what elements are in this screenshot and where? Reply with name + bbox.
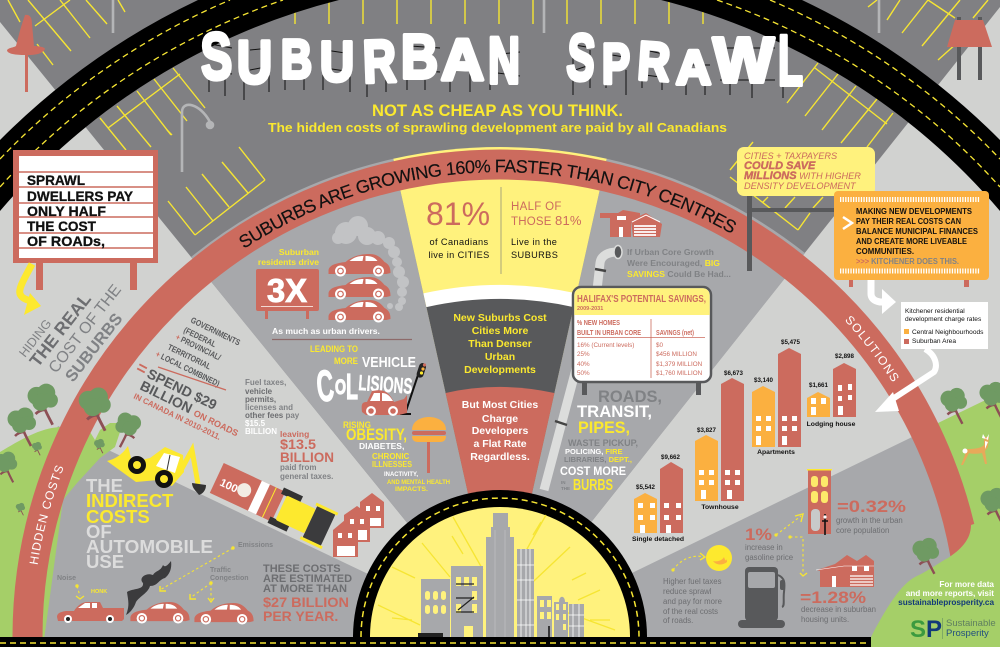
- arc heading: SUBURBS ARE GROWING 160% FASTER THAN CITY CENTRES: [240, 160, 736, 248]
- stat: half of those: THOSE 81%: [511, 213, 582, 228]
- indirect costs heading: OF: [86, 521, 112, 542]
- stat: 1.28 percent: [800, 588, 876, 624]
- stat: 81 percent: [426, 196, 490, 260]
- chart: development charges, townhouse: $6,673: [724, 370, 743, 377]
- leaving 13.5 billion: [280, 429, 334, 481]
- callout: making new developments: AND CREATE MORE LIVEABLE: [856, 237, 968, 246]
- leading to more vehicle collisions: MORE: [334, 356, 358, 367]
- obesity text: AND MENTAL HEALTH: [387, 479, 450, 486]
- leaving 13.5 billion: general taxes.: [280, 472, 333, 481]
- text: if urban core growth: SAVINGS Could Be Had...: [627, 269, 731, 279]
- indirect costs heading: THE: [86, 475, 123, 496]
- obesity text: OBESITY,: [346, 426, 407, 444]
- title: P: [602, 32, 630, 96]
- chart: development charges, apartments: $5,475: [781, 339, 800, 346]
- dotted arrows: automobile costs: [75, 546, 235, 602]
- text: higher fuel taxes: of roads.: [663, 616, 693, 625]
- callout: cities and taxpayers: MILLIONS WITH HIGHER: [744, 170, 861, 182]
- text: higher fuel taxes: of the real costs: [663, 607, 718, 616]
- divider: [500, 187, 502, 274]
- leading to more vehicle collisions: O: [335, 376, 346, 399]
- text: flat rate: Charge: [482, 413, 518, 425]
- indirect costs heading: USE: [86, 551, 124, 572]
- icon: coin: [671, 545, 732, 572]
- roads transit pipes text: [560, 388, 662, 494]
- stat: 0.32 percent: =0.32%: [837, 497, 906, 516]
- sign: halifax potential savings: BUILT IN URBAN CORE: [577, 330, 641, 337]
- sun dome: [370, 507, 630, 637]
- fuel taxes text: permits,: [245, 395, 276, 404]
- callout: making new developments: BALANCE MUNICIPAL FINANCES: [856, 227, 979, 236]
- sign: halifax potential savings: 40%: [577, 361, 590, 368]
- text: new suburbs cost: Cities More: [472, 325, 528, 337]
- callout: cities and taxpayers: COULD SAVE: [744, 160, 816, 172]
- fuel taxes text: Fuel taxes,: [245, 378, 286, 387]
- chart: development charges, apartments: [752, 339, 801, 456]
- callout: making new developments: [834, 191, 989, 287]
- chart: development charges, townhouse: [695, 370, 744, 511]
- green footer text: For more data: [939, 580, 994, 589]
- sector: roads and pipes: [500, 159, 805, 637]
- text: flat rate: Developers: [472, 425, 528, 437]
- callout: cities and taxpayers: DENSITY DEVELOPMENT: [744, 181, 857, 191]
- obesity text: RISING: [343, 420, 371, 430]
- icon: suburban house: [816, 555, 874, 587]
- sun rays: [378, 515, 615, 630]
- stat: 81 percent: 81%: [426, 196, 490, 232]
- logo: sustainable prosperity: Sustainable: [946, 618, 996, 629]
- chart: development charges, lodging house: $1,661: [809, 382, 828, 389]
- text: higher fuel taxes: and pay for more: [663, 597, 722, 606]
- leaving 13.5 billion: BILLION: [280, 449, 334, 465]
- chart: development charges, single detached: $5,542: [636, 484, 655, 491]
- title: U: [320, 30, 354, 94]
- these costs text: AT MORE THAN: [263, 583, 347, 595]
- subtitle: The hidden costs of sprawling development are paid by all Canadians: [268, 121, 727, 135]
- fuel taxes text: [245, 378, 300, 436]
- indirect costs heading: [86, 475, 213, 572]
- title: S: [565, 19, 598, 95]
- chart: development charges, single detached: Single detached: [632, 536, 684, 543]
- subtitle: NOT AS CHEAP AS YOU THINK.: [372, 102, 623, 120]
- right light ground wedge: [500, 7, 1000, 647]
- icon: burger: [412, 417, 446, 473]
- parking lines: [8, 0, 988, 235]
- three cars: [328, 254, 390, 322]
- outer road: [0, 0, 1000, 211]
- icon: house: [600, 210, 662, 237]
- icon: red road sign right: [947, 17, 992, 80]
- sign: halifax potential savings: % NEW HOMES: [577, 320, 620, 327]
- text: higher fuel taxes: [663, 577, 722, 625]
- dotted arrows: gasoline effects: [774, 514, 807, 576]
- green hill left: [0, 423, 123, 640]
- 3x sign: [256, 269, 319, 319]
- text: higher fuel taxes: reduce sprawl: [663, 587, 712, 596]
- these costs text: ARE ESTIMATED: [263, 573, 352, 585]
- roads transit pipes text: ROADS,: [598, 388, 662, 406]
- sign: halifax potential savings: $456 MILLION: [656, 351, 697, 358]
- chart: development charges, single detached: [632, 454, 684, 543]
- callout: making new developments: COMMUNITIES.: [856, 247, 914, 256]
- sign: halifax potential savings: SAVINGS (net): [656, 330, 694, 337]
- cars in traffic: [57, 602, 254, 624]
- fuel taxes text: $15.5: [245, 419, 266, 428]
- title: N: [488, 23, 520, 97]
- 3x sign: 3X: [267, 272, 307, 309]
- stat: 1.28 percent: housing units.: [801, 615, 849, 624]
- roads transit pipes text: PIPES,: [578, 419, 630, 437]
- fuel taxes text: licenses and: [245, 403, 293, 412]
- government spending text: + PROVINCIAL/: [174, 332, 223, 363]
- sign: halifax potential savings: 25%: [577, 351, 590, 358]
- text: higher fuel taxes: Higher fuel taxes: [663, 577, 722, 586]
- indirect costs heading: AUTOMOBILE: [86, 536, 213, 557]
- hiding the real cost heading: THE REAL: [25, 289, 95, 370]
- indirect costs heading: INDIRECT: [86, 490, 174, 511]
- title: L: [778, 22, 803, 101]
- green footer text: [898, 580, 994, 607]
- leading to more vehicle collisions: LEADING TO: [310, 344, 358, 355]
- title: U: [237, 29, 272, 96]
- hiding the real cost heading: COST OF THE: [46, 282, 125, 376]
- leaving 13.5 billion: paid from: [280, 463, 316, 472]
- government spending text: (FEDERAL: [182, 325, 218, 349]
- icon: gas pump: [738, 567, 785, 628]
- title: A: [441, 28, 484, 93]
- leading to more vehicle collisions: VEHICLE: [362, 354, 416, 371]
- title: B: [401, 23, 438, 92]
- chart: development charges, apartments: $3,140: [754, 377, 773, 384]
- sign: halifax potential savings: [573, 287, 711, 395]
- title: R: [636, 31, 672, 93]
- hiding the real cost heading: HIDING: [16, 317, 54, 360]
- suburban residents drive: [258, 247, 319, 267]
- legend: Kitchener residential: [905, 308, 965, 315]
- street lamps: [113, 0, 879, 172]
- automobile labels: Traffic: [210, 567, 231, 574]
- green footer text: and more reports, visit: [906, 589, 994, 598]
- legend: Suburban Area: [912, 338, 956, 345]
- white band: [423, 285, 577, 637]
- stat: 81 percent: of Canadians: [430, 237, 488, 247]
- title: B: [281, 28, 312, 90]
- stat: 1.28 percent: decrease in suburban: [801, 605, 876, 614]
- leaving 13.5 billion: $13.5: [280, 437, 317, 452]
- government spending text: [132, 315, 242, 442]
- government spending text: GOVERNMENTS: [189, 315, 242, 348]
- government spending text: + LOCAL COMBINED): [154, 349, 222, 389]
- title: W: [713, 24, 775, 96]
- stat: 0.32 percent: core population: [836, 526, 889, 535]
- title: S: [200, 18, 233, 94]
- callout: making new developments: PAY THEIR REAL COSTS CAN: [856, 217, 961, 226]
- loader: [107, 446, 206, 495]
- arrow: legend to chart: [875, 349, 936, 412]
- green hill right: [938, 393, 1000, 640]
- houses: [333, 493, 384, 557]
- central yellow sector: [393, 147, 607, 637]
- stat: 0.32 percent: growth in the urban: [836, 516, 903, 525]
- title: R: [362, 27, 397, 96]
- marquee sign: sprawl dwellers pay: ONLY HALF: [27, 204, 106, 219]
- roads transit pipes text: WASTE PICKUP,: [568, 438, 638, 448]
- chart: development charges, lodging house: Lodging house: [807, 421, 856, 428]
- callout: making new developments: >>> KITCHENER DOES THIS.: [856, 257, 959, 266]
- suburban residents drive: Suburban: [279, 247, 319, 257]
- sector: indirect costs: [10, 426, 500, 637]
- bulldozer: [267, 487, 338, 549]
- roads transit pipes text: COST MORE: [560, 464, 626, 478]
- title: [200, 18, 803, 101]
- text: if urban core growth: Were Encouraged, BIG: [627, 258, 720, 268]
- chart: development charges, townhouse: $3,827: [697, 427, 716, 434]
- logo: sustainable prosperity: Prosperity: [946, 628, 989, 639]
- icon: deer: [961, 434, 989, 465]
- indirect costs heading: COSTS: [86, 506, 150, 527]
- marquee sign: sprawl dwellers pay: THE COST: [27, 219, 97, 234]
- obesity text: CHRONIC: [372, 452, 410, 461]
- left light ground wedge: [0, 22, 500, 647]
- obesity text: ILLNESSES: [372, 460, 413, 469]
- sign: halifax potential savings: 2009-2031: [577, 306, 603, 312]
- text: flat rate: Regardless.: [470, 451, 530, 463]
- stat: half of those: SUBURBS: [511, 250, 558, 260]
- suburban residents drive: residents drive: [258, 257, 319, 267]
- text: flat rate: a Flat Rate: [473, 438, 527, 450]
- inner ring road: [353, 490, 647, 637]
- stat: 1.28 percent: =1.28%: [800, 588, 866, 607]
- automobile labels: Noise: [57, 575, 76, 582]
- text: if urban core growth: [627, 247, 731, 279]
- automobile labels: Emissions: [238, 542, 273, 549]
- sign: halifax potential savings: 50%: [577, 370, 590, 377]
- marquee sign: sprawl dwellers pay: SPRAWL: [27, 173, 85, 188]
- callout: making new developments: MAKING NEW DEVELOPMENTS: [856, 207, 973, 216]
- sector: fuel taxes: [500, 423, 990, 637]
- chart: development charges, lodging house: [807, 353, 856, 428]
- these costs text: [263, 563, 352, 624]
- emissions smoke: [126, 561, 171, 615]
- stat: 0.32 percent: [836, 497, 906, 535]
- automobile labels: [57, 542, 273, 595]
- roads transit pipes text: IN: [561, 480, 566, 485]
- icon: tall red building: [807, 469, 832, 535]
- hiding the real cost heading: SUBURBS: [62, 310, 126, 385]
- logo: sustainable prosperity: [910, 616, 996, 643]
- leading to more vehicle collisions: LISIONS: [358, 370, 413, 399]
- as much as urban drivers: As much as urban drivers.: [272, 326, 380, 336]
- leaving 13.5 billion: leaving: [280, 429, 309, 439]
- stat: half of those: [511, 201, 582, 260]
- title scaffolding: [209, 44, 783, 100]
- obesity text: IMPACTS.: [395, 486, 428, 493]
- text: flat rate: But Most Cities: [462, 399, 538, 411]
- green hill right foreground: [871, 515, 1000, 647]
- pipe: [544, 246, 622, 490]
- chart: development charges, apartments: Apartments: [757, 449, 795, 456]
- government spending text: BILLION ON ROADS: [138, 377, 242, 439]
- city skyline: [418, 513, 584, 638]
- leading to more vehicle collisions: C: [314, 361, 336, 412]
- these costs text: PER YEAR.: [263, 608, 338, 624]
- hiding the real cost heading: [16, 282, 126, 385]
- text: new suburbs cost: New Suburbs Cost: [453, 312, 547, 324]
- sign post: yellow callout: [747, 196, 836, 271]
- subtitle: [268, 102, 727, 135]
- legend: [901, 302, 988, 349]
- smoke: [332, 216, 409, 311]
- these costs text: THESE COSTS: [263, 563, 341, 575]
- sign: halifax potential savings: $1,760 MILLION: [656, 370, 703, 377]
- text: new suburbs cost: Developments: [464, 364, 536, 376]
- red inner sector: [446, 387, 554, 637]
- leading to more vehicle collisions: [272, 340, 416, 412]
- text: new suburbs cost: Than Denser: [468, 338, 532, 350]
- government spending text: TERRITORIAL: [166, 342, 213, 371]
- marquee sign: sprawl dwellers pay: DWELLERS PAY: [27, 189, 133, 204]
- text: if urban core growth: If Urban Core Growth: [627, 247, 714, 257]
- legend: Central Neighbourhoods: [912, 329, 984, 336]
- automobile labels: Congestion: [210, 575, 248, 582]
- stat: 81 percent: live in CITIES: [428, 250, 490, 260]
- stat: 1 percent gasoline: 1%: [745, 525, 772, 544]
- government spending text: SPEND $29: [145, 365, 220, 413]
- text: new suburbs cost: Urban: [485, 351, 515, 363]
- legend: development charge rates: [905, 316, 982, 323]
- stat: 1 percent gasoline: gasoline price: [745, 553, 793, 562]
- stat: half of those: HALF OF: [511, 201, 562, 213]
- sign: halifax potential savings: $1,379 MILLION: [656, 361, 703, 368]
- sign: halifax potential savings: 16% (Current levels): [577, 342, 634, 349]
- callout: cities and taxpayers: [737, 147, 875, 196]
- roads transit pipes text: THE: [561, 486, 570, 491]
- roads transit pipes text: POLICING, FIRE: [565, 447, 623, 456]
- icon: crashed car and traffic light: [362, 362, 427, 416]
- icon: red road sign left: [7, 15, 45, 92]
- government spending text: IN CANADA IN 2010-2011.: [132, 392, 222, 442]
- these costs text: $27 BILLION: [263, 594, 349, 610]
- sign: halifax potential savings: HALIFAX'S POTENTIAL SAVINGS,: [577, 293, 706, 305]
- stat: 1 percent gasoline: increase in: [745, 543, 783, 552]
- chart: development charges, lodging house: $2,898: [835, 353, 854, 360]
- automobile labels: HONK: [91, 589, 107, 595]
- dark sector: [426, 299, 574, 637]
- roads transit pipes text: BURBS: [573, 477, 613, 494]
- arc label: hidden costs: HIDDEN COSTS: [30, 466, 63, 564]
- sector: driving and health: [191, 159, 500, 637]
- logo: sustainable prosperity: SP: [910, 616, 942, 643]
- fuel taxes text: other fees pay: [245, 411, 300, 420]
- text: flat rate: [462, 399, 538, 463]
- arrow: yellow sign to hiding: [20, 264, 41, 315]
- chart: development charges, townhouse: Townhouse: [701, 504, 739, 511]
- arc label: solutions: SOLUTIONS: [846, 316, 898, 382]
- sign: halifax potential savings: $0: [656, 342, 664, 349]
- title: A: [676, 42, 711, 95]
- green footer text: sustainableprosperity.ca: [898, 598, 994, 607]
- callout: cities and taxpayers: CITIES + TAXPAYERS: [744, 151, 838, 161]
- obesity text: DIABETES,: [359, 441, 404, 451]
- banknote: [210, 463, 285, 522]
- bottom road strip: [0, 637, 871, 647]
- leading to more vehicle collisions: L: [346, 366, 358, 407]
- trees left: [0, 384, 141, 515]
- fuel taxes text: vehicle: [245, 387, 273, 396]
- fuel taxes text: BILLION: [245, 427, 277, 436]
- marquee sign: sprawl dwellers pay: OF ROADs,: [27, 234, 105, 249]
- government spending text: =: [133, 358, 151, 379]
- obesity text: [343, 420, 450, 493]
- stat: half of those: Live in the: [511, 237, 557, 247]
- chart: development charges, single detached: $9,662: [661, 454, 680, 461]
- marquee sign: sprawl dwellers pay: [13, 150, 158, 290]
- banknote: 100: [218, 477, 239, 496]
- roads transit pipes text: LIBRARIES, DEPT.,: [564, 455, 632, 464]
- red arc band: [28, 164, 972, 637]
- stat: 1 percent gasoline: [745, 525, 793, 562]
- text: new suburbs cost: [453, 312, 547, 376]
- trees right: [912, 382, 1000, 574]
- obesity text: INACTIVITY,: [384, 471, 418, 478]
- arrow: callout to legend: [871, 280, 896, 314]
- roads transit pipes text: TRANSIT,: [577, 403, 652, 421]
